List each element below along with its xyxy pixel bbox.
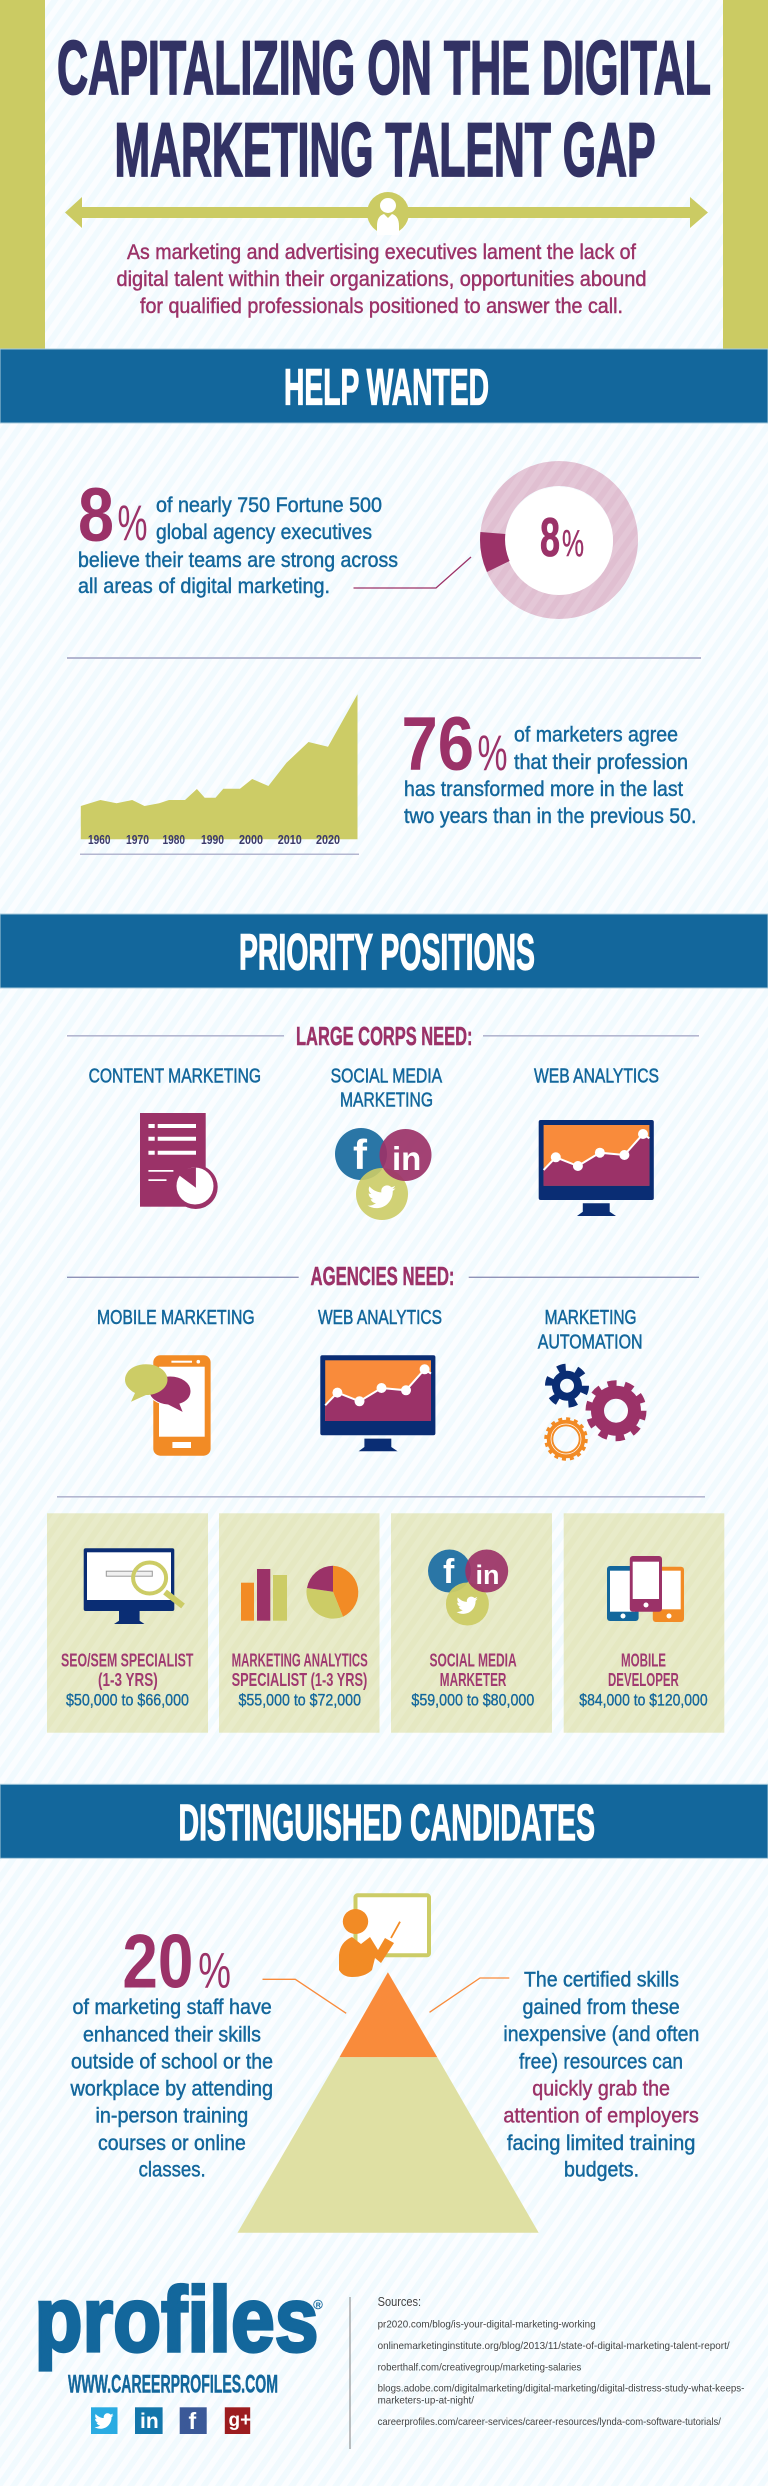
donut chart: 8 percent: 8	[540, 506, 560, 568]
pyramid chart	[238, 1972, 539, 2233]
header side band left	[0, 0, 45, 349]
icon: facebook	[180, 2407, 207, 2434]
area chart: 1960	[88, 832, 110, 847]
text: certified skills	[503, 1968, 699, 2182]
stat: 20 percent text	[70, 1920, 273, 2182]
logo: profiles: profiles	[34, 2269, 318, 2371]
stat: 20 percent text: %	[198, 1942, 231, 1998]
area chart: 1990	[201, 832, 224, 847]
stat: 8 percent text: %	[118, 495, 148, 551]
stat: 76 percent text	[402, 702, 696, 828]
salary card: marketing analytics specialist: SPECIALIST (1-3 YRS)	[232, 1669, 367, 1690]
sub heading: agencies need: AGENCIES NEED:	[310, 1261, 454, 1291]
sources list: blogs.adobe.com/digitalmarketing/digital-marketing/digital-distress-study-what-keeps-	[378, 2383, 745, 2395]
stat: 76 percent text: of marketers agree	[514, 723, 678, 747]
salary card: mobile developer: MOBILE	[621, 1650, 666, 1671]
area chart	[80, 694, 359, 855]
stat: 8 percent text	[78, 473, 398, 598]
icon: analytics monitor	[539, 1120, 654, 1216]
label: marketing automation: AUTOMATION	[538, 1331, 642, 1353]
title	[57, 26, 711, 193]
area chart: 2010	[278, 832, 302, 847]
salary card: marketing analytics specialist	[219, 1513, 380, 1733]
stat: 8 percent text: believe their teams are strong across	[78, 548, 398, 572]
sources list: onlinemarketinginstitute.org/blog/2013/11/state-of-digital-marketing-talent-report/	[378, 2340, 730, 2352]
icon: linkedin: in	[140, 2410, 159, 2433]
icon: presenter at board	[339, 1895, 429, 1977]
icon: social media circles: f	[353, 1131, 368, 1178]
icon: linkedin	[135, 2407, 163, 2434]
text: certified skills: attention of employers	[503, 2104, 699, 2128]
salary card: mobile developer	[564, 1513, 724, 1733]
intro text: digital talent within their organizations, opportunities abound	[116, 267, 646, 291]
stat: 20 percent text: in-person training	[96, 2104, 248, 2128]
area chart: 1980	[162, 832, 185, 847]
stat: 20 percent text: workplace by attending	[70, 2077, 273, 2101]
icon: document with pie	[140, 1113, 218, 1209]
label: web analytics: WEB ANALYTICS	[534, 1066, 659, 1088]
stat: 8 percent text: of nearly 750 Fortune 500	[156, 493, 382, 517]
icon: double arrow with person	[65, 192, 708, 235]
stat: 20 percent text: classes.	[139, 2158, 206, 2182]
section banner: priority positions: PRIORITY POSITIONS	[239, 924, 535, 980]
section banner: help wanted	[0, 349, 768, 423]
stat: 20 percent text: outside of school or the	[71, 2049, 273, 2073]
sources list: marketers-up-at-night/	[378, 2395, 474, 2407]
website url: WWW.CAREERPROFILES.COM	[68, 2370, 278, 2398]
salary card: social media marketer: in	[476, 1560, 500, 1590]
stat: 76 percent text: that their profession	[514, 750, 688, 774]
icon: facebook: f	[188, 2408, 196, 2434]
label: social media marketing	[331, 1066, 443, 1112]
icon: analytics monitor	[320, 1355, 435, 1451]
stat: 76 percent text: two years than in the previous 50.	[404, 804, 696, 828]
text: certified skills: The certified skills	[524, 1968, 679, 1992]
callout line right	[430, 1978, 509, 2012]
text: certified skills: free) resources can	[519, 2049, 683, 2073]
salary card: SEO/SEM specialist: $50,000 to $66,000	[66, 1691, 189, 1710]
intro text	[116, 240, 646, 318]
icon: social media circles: in	[392, 1140, 421, 1177]
salary card: marketing analytics specialist: $55,000 to $72,000	[238, 1691, 361, 1710]
salary card: mobile developer: $84,000 to $120,000	[579, 1691, 708, 1710]
stat: 20 percent text: 20	[122, 1920, 193, 2004]
sources list: careerprofiles.com/career-services/career-resources/lynda-com-software-tutorials/	[378, 2416, 721, 2428]
leader line to donut	[354, 557, 471, 588]
area chart: 1970	[126, 832, 149, 847]
stat: 20 percent text: courses or online	[98, 2131, 246, 2155]
sources list: pr2020.com/blog/is-your-digital-marketing-working	[378, 2319, 596, 2331]
section banner: priority positions	[0, 914, 768, 988]
label: web analytics: WEB ANALYTICS	[318, 1307, 442, 1329]
label: social media marketing: SOCIAL MEDIA	[331, 1066, 443, 1088]
stat: 20 percent text: of marketing staff have	[72, 1995, 272, 2019]
area chart: 2000	[239, 832, 263, 847]
header side band right	[723, 0, 768, 349]
salary card: social media marketer: f	[443, 1553, 455, 1591]
donut chart: 8 percent	[480, 474, 626, 606]
stat: 76 percent text: 76	[402, 702, 474, 787]
sources list	[378, 2294, 745, 2428]
text: certified skills: quickly grab the	[532, 2077, 670, 2101]
stat: 8 percent text: all areas of digital marketing.	[78, 574, 330, 598]
text: certified skills: inexpensive (and often	[503, 2022, 699, 2046]
salary card: SEO/SEM specialist: SEO/SEM SPECIALIST	[61, 1650, 194, 1671]
icon: social media circles	[335, 1128, 432, 1220]
sources list: roberthalf.com/creativegroup/marketing-salaries	[378, 2361, 581, 2373]
icon: twitter	[91, 2407, 118, 2434]
sources list: Sources:	[378, 2294, 421, 2309]
label: marketing automation	[538, 1307, 642, 1353]
label: content marketing: CONTENT MARKETING	[89, 1066, 261, 1088]
callout line left	[262, 1979, 346, 2013]
stat: 8 percent text: global agency executives	[156, 520, 372, 544]
salary card: social media marketer: $59,000 to $80,000	[411, 1691, 534, 1710]
stat: 20 percent text: enhanced their skills	[83, 2022, 261, 2046]
salary card: SEO/SEM specialist: (1-3 YRS)	[98, 1669, 158, 1690]
salary card: SEO/SEM specialist	[47, 1513, 208, 1733]
text: certified skills: gained from these	[522, 1995, 680, 2019]
section banner: help wanted: HELP WANTED	[284, 358, 489, 416]
salary card: mobile developer: DEVELOPER	[608, 1669, 679, 1690]
label: social media marketing: MARKETING	[340, 1090, 433, 1112]
intro text: As marketing and advertising executives lament the lack of	[127, 240, 636, 264]
icon: mobile phone with speech bubbles	[125, 1355, 211, 1456]
section banner: distinguished candidates	[0, 1784, 768, 1858]
icon: google plus	[225, 2407, 251, 2434]
stat: 8 percent text: 8	[78, 473, 114, 558]
salary card: marketing analytics specialist: MARKETING ANALYTICS	[232, 1650, 368, 1671]
sub heading: large corps need: LARGE CORPS NEED:	[296, 1021, 472, 1051]
stat: 76 percent text: %	[478, 725, 508, 781]
label: marketing automation: MARKETING	[545, 1307, 637, 1329]
text: certified skills: budgets.	[564, 2158, 639, 2182]
text: certified skills: facing limited training	[507, 2131, 695, 2155]
salary card: social media marketer: SOCIAL MEDIA	[430, 1650, 517, 1671]
label: mobile marketing: MOBILE MARKETING	[97, 1307, 255, 1329]
icon: google plus: g+	[228, 2410, 251, 2431]
salary card: social media marketer: MARKETER	[440, 1669, 506, 1690]
donut chart: 8 percent: %	[562, 523, 584, 565]
stat: 76 percent text: has transformed more in the last	[404, 777, 683, 801]
intro text: for qualified professionals positioned to answer the call.	[140, 294, 623, 318]
salary card: social media marketer	[391, 1513, 552, 1733]
logo: profiles: R	[316, 2302, 321, 2309]
icon: gears	[546, 1368, 644, 1459]
area chart: 2020	[316, 832, 340, 847]
